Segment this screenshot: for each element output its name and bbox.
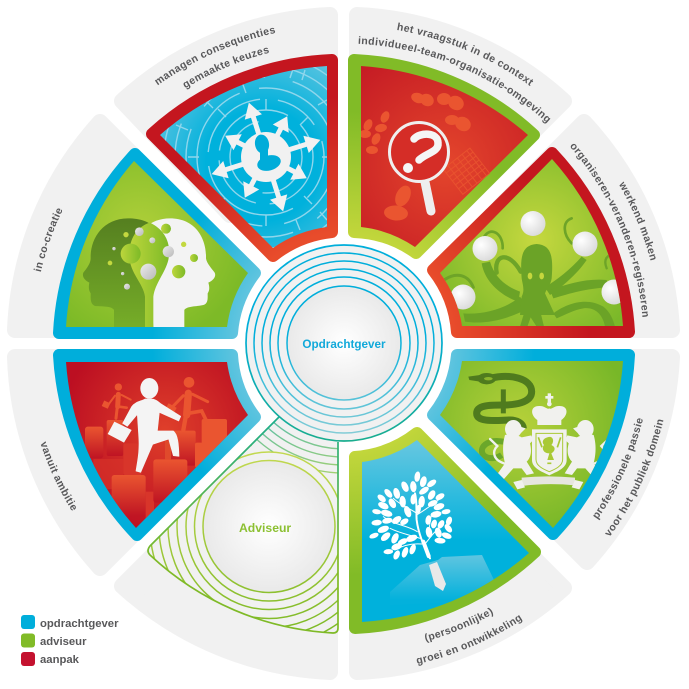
label: managen consequenties: managen consequenties xyxy=(155,28,276,86)
panel fill: red xyxy=(361,66,528,247)
icon: octopus xyxy=(445,211,626,327)
panel: in co-creatie xyxy=(7,114,261,339)
frame: red xyxy=(152,60,332,256)
panel: het vraagstuk in de context xyxy=(348,7,572,259)
icon: hill and spade xyxy=(390,555,494,602)
panel fill: blue xyxy=(160,66,327,248)
label: organiseren-veranderen-regisseren: organiseren-veranderen-regisseren xyxy=(570,144,648,317)
panel: vanuit ambitie xyxy=(7,349,261,576)
panel fill: red xyxy=(66,362,248,528)
icon: coat of arms xyxy=(490,393,609,489)
legend: opdrachtgever xyxy=(40,618,119,630)
panel fill: green xyxy=(440,361,623,528)
icon: building xyxy=(443,148,490,194)
panel: managen consequenties xyxy=(114,7,338,262)
rings: opdrachtgever continuation xyxy=(257,422,338,474)
outline: adviseur wedge xyxy=(148,417,338,633)
icon: stairs and climbing figures xyxy=(85,377,227,518)
frame: blue xyxy=(59,154,255,333)
frame: green xyxy=(355,433,535,628)
panel fill: green xyxy=(440,159,623,326)
label: professionele passie: professionele passie xyxy=(593,418,643,520)
frame: red xyxy=(433,153,629,332)
panel: werkend maken xyxy=(427,114,680,338)
icon: maze xyxy=(164,67,327,248)
icon: right lion xyxy=(564,420,606,475)
icon: person with arrows xyxy=(209,100,323,214)
icon: tree xyxy=(369,472,453,560)
frame: green xyxy=(354,60,534,253)
icon: magnifier with question mark xyxy=(390,122,448,211)
panel fill: blue xyxy=(362,440,529,622)
legend: aanpak xyxy=(40,654,80,666)
label: groei en ontwikkeling: groei en ontwikkeling xyxy=(416,615,522,666)
legend: adviseur xyxy=(40,636,87,648)
panel: groei en ontwikkeling xyxy=(349,427,572,680)
icon: left lion xyxy=(490,420,534,482)
label: (persoonlijke): (persoonlijke) xyxy=(425,608,494,643)
panel fill: green xyxy=(66,161,248,327)
icon: snake and staff xyxy=(468,373,532,458)
icon: two heads xyxy=(83,218,215,327)
panel: adviseur backdrop xyxy=(122,500,330,672)
frame: blue xyxy=(59,355,255,535)
label: vanuit ambitie: vanuit ambitie xyxy=(40,441,76,510)
panel: opdrachtgever xyxy=(246,245,442,441)
label: in co-creatie: in co-creatie xyxy=(34,208,62,272)
rings: adviseur xyxy=(151,446,338,632)
icon: clouds and people xyxy=(359,91,473,222)
label: het vraagstuk in de context: het vraagstuk in de context xyxy=(397,22,534,86)
label: individueel-team-organisatie-omgeving: individueel-team-organisatie-omgeving xyxy=(358,36,550,124)
panel: professionele passie xyxy=(427,349,680,570)
heading: Adviseur: Adviseur xyxy=(239,521,291,535)
label: werkend maken: werkend maken xyxy=(620,182,656,260)
panel: adviseur xyxy=(147,416,339,634)
heading: Opdrachtgever: Opdrachtgever xyxy=(302,338,386,351)
label: voor het publiek domein: voor het publiek domein xyxy=(605,420,664,536)
frame: blue xyxy=(433,355,629,534)
label: gemaakte keuzes: gemaakte keuzes xyxy=(184,48,269,90)
legend xyxy=(21,615,119,666)
